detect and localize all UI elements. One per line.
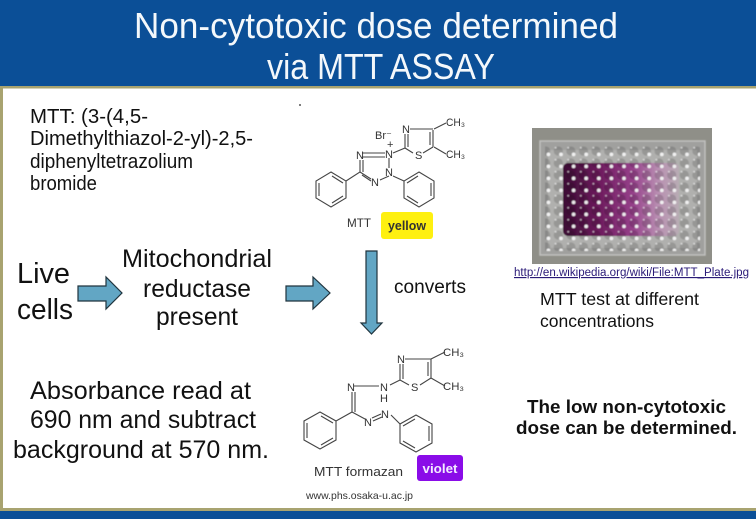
chemical structure: MTT: N — [385, 149, 393, 161]
arrow: live cells to reductase — [78, 277, 122, 309]
flow text: mitochondrial reductase present: reductase — [143, 275, 251, 303]
MTT definition text — [30, 106, 253, 195]
left border line — [0, 88, 3, 508]
chemical structure: MTT formazan: N — [381, 409, 389, 421]
MTT definition text: MTT: (3-(4,5- — [30, 106, 148, 128]
stray dot — [299, 104, 301, 106]
MTT definition text: diphenyltetrazolium — [30, 151, 193, 173]
converts label: converts — [394, 277, 466, 298]
title: via MTT ASSAY — [267, 46, 495, 87]
arrow: down conversion — [361, 251, 382, 334]
photo: MTT plate — [532, 128, 712, 264]
right phenyl ring — [404, 172, 434, 207]
chemical structure: MTT formazan: N — [347, 382, 355, 394]
right phenyl ring — [400, 415, 432, 452]
flow text: live cells: cells — [17, 294, 73, 326]
chemical structure: MTT: S — [415, 150, 422, 162]
absorbance text: Absorbance read at — [30, 377, 251, 405]
title — [134, 5, 618, 87]
left phenyl ring — [304, 412, 336, 449]
plate caption — [540, 289, 699, 331]
conclusion text: The low non-cytotoxic — [527, 396, 726, 417]
plate caption: concentrations — [540, 311, 654, 331]
flow text: mitochondrial reductase present: present — [156, 303, 238, 331]
chemical structure: MTT: CH₃ — [446, 117, 465, 129]
header banner — [0, 0, 756, 88]
absorbance text: background at 570 nm. — [13, 436, 269, 464]
formazan bonds — [336, 352, 445, 424]
conclusion text: dose can be determined. — [516, 417, 737, 438]
absorbance text — [13, 377, 269, 464]
chemical structure: MTT formazan: N — [380, 382, 388, 394]
chemical structure: MTT formazan: N — [397, 354, 405, 366]
MTT definition text: bromide — [30, 173, 97, 195]
flow text: live cells — [17, 258, 73, 326]
chemical structure: MTT formazan: N — [364, 417, 372, 429]
chemical structure: MTT: N — [371, 177, 379, 189]
title: Non-cytotoxic dose determined — [134, 5, 618, 46]
chemical structure: MTT: + — [387, 139, 393, 151]
label: MTT formazan: MTT formazan — [314, 465, 403, 479]
MTT definition text: Dimethylthiazol-2-yl)-2,5- — [30, 128, 253, 150]
source link: http://en.wikipedia.org/wiki/File:MTT_Plate.jpg — [514, 267, 749, 279]
chemical structure: MTT formazan: CH₃ — [443, 381, 464, 393]
violet badge: violet — [422, 461, 458, 476]
yellow badge — [381, 212, 433, 239]
chemical structure: MTT: Br⁻ — [375, 130, 392, 142]
conclusion text — [516, 396, 737, 438]
chemical structure: MTT formazan: CH₃ — [443, 347, 464, 359]
plate caption: MTT test at different — [540, 289, 699, 309]
chemical structure: MTT: CH₃ — [446, 149, 465, 161]
flow text: live cells: Live — [17, 258, 70, 290]
label: MTT: MTT — [347, 218, 371, 230]
absorbance text: 690 nm and subtract — [30, 406, 256, 434]
chemical structure: MTT: N — [402, 124, 410, 136]
flow text: mitochondrial reductase present — [122, 245, 272, 331]
chemical structure: MTT — [316, 117, 465, 239]
chemical structure: MTT formazan: S — [411, 382, 418, 394]
source credit: www.phs.osaka-u.ac.jp — [305, 490, 413, 502]
tetrazolium and thiazole bonds — [346, 123, 446, 181]
flow text: mitochondrial reductase present: Mitochondrial — [122, 245, 272, 273]
left phenyl ring — [316, 172, 346, 207]
arrow: reductase to conversion — [286, 277, 330, 309]
chemical structure: MTT: N — [356, 150, 364, 162]
violet badge — [417, 455, 463, 481]
yellow badge: yellow — [388, 219, 426, 233]
chemical structure: MTT: N — [385, 167, 393, 179]
footer bar — [0, 508, 756, 519]
chemical structure: MTT formazan — [304, 347, 464, 481]
chemical structure: MTT formazan: H — [380, 393, 388, 405]
